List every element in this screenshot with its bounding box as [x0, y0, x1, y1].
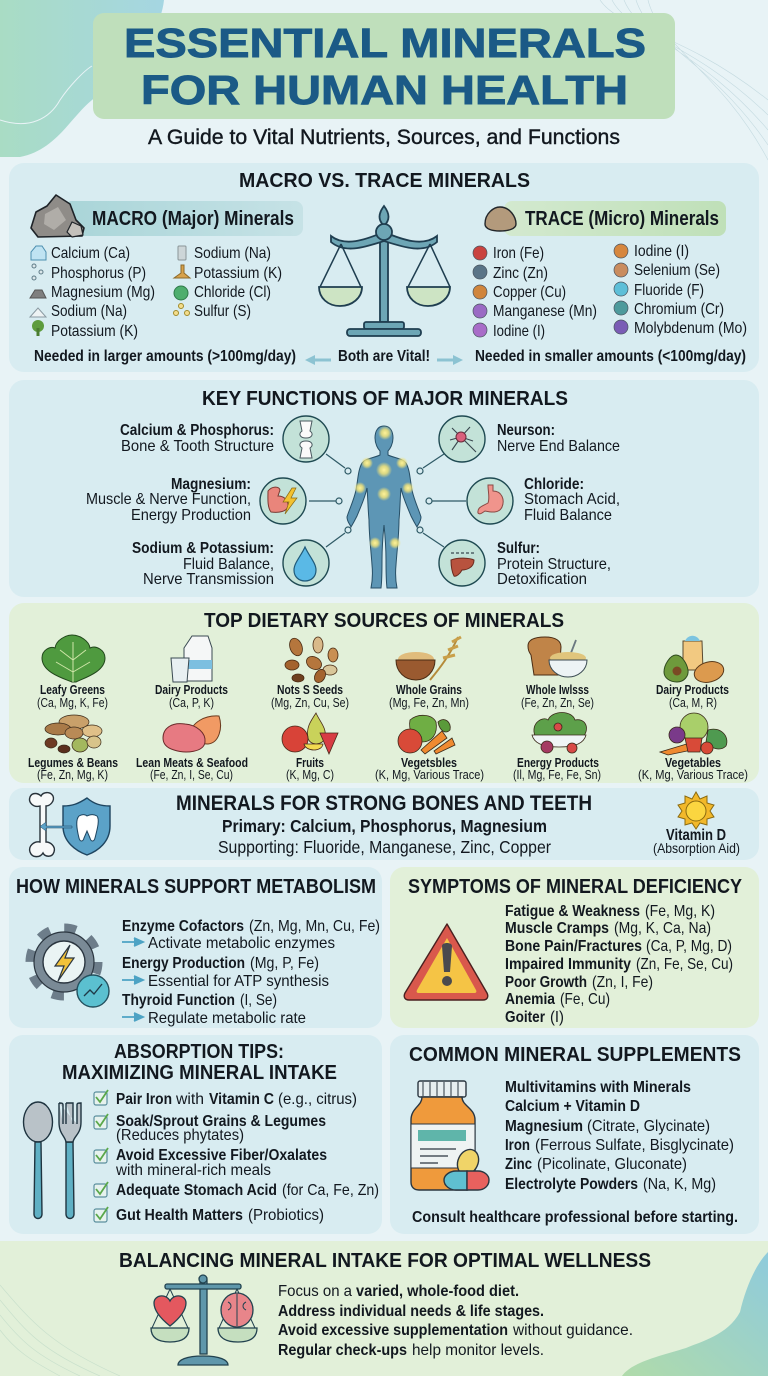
tips text: Avoid Excessive Fiber/Oxalates [116, 1147, 327, 1164]
tips text: Pair Iron [116, 1091, 172, 1108]
trace list: Fluoride (F) [634, 282, 704, 299]
function: neurson: Nerve End Balance [497, 438, 620, 455]
function: chloride: Chloride: [524, 476, 584, 493]
macro list: Sodium (Na) [51, 303, 127, 320]
icon: rock [31, 195, 84, 237]
supplements list [505, 1079, 734, 1193]
function: sodium potassium: Fluid Balance, [183, 556, 274, 573]
vitamin D note: Vitamin D [666, 827, 726, 844]
symptoms list: Impaired Immunity [505, 956, 631, 973]
metabolism text: (I, Se) [240, 992, 277, 1009]
tips text: (e.g., citrus) [278, 1091, 357, 1108]
balancing text: Focus on a [278, 1283, 352, 1300]
trace list: Iodine (I) [634, 243, 689, 260]
icon: spoon and fork [24, 1102, 81, 1218]
comparison row [34, 348, 746, 365]
vitamin D note: (Absorption Aid) [653, 840, 740, 856]
symptoms list: Muscle Cramps [505, 920, 609, 937]
metabolism text: Thyroid Function [122, 992, 235, 1009]
balancing text: Address individual needs & life stages. [278, 1303, 544, 1320]
food: vegetables: (K, Mg, Various Trace) [375, 768, 484, 782]
icon: warning triangle [404, 924, 488, 1000]
trace list: Iron (Fe) [493, 245, 544, 262]
symptoms list: (Zn, Fe, Se, Cu) [636, 956, 733, 973]
icon: bone [30, 793, 54, 857]
food: vegetables: Vegetsbles [401, 756, 457, 770]
trace list: Chromium (Cr) [634, 301, 724, 318]
supplements list: (Picolinate, Gluconate) [537, 1156, 687, 1173]
symptoms list [505, 903, 733, 1026]
function: sodium potassium [132, 540, 274, 588]
supplements list: (Ferrous Sulfate, Bisglycinate) [535, 1137, 734, 1154]
icon: joint [283, 416, 329, 462]
food: whole grains [389, 637, 469, 710]
heading: supplements: COMMON MINERAL SUPPLEMENTS [409, 1044, 741, 1066]
title block: ESSENTIAL MINERALS [124, 20, 646, 66]
icon: gear with bolt [30, 928, 109, 1007]
tips text: with [175, 1091, 204, 1108]
function: magnesium: Energy Production [131, 507, 251, 524]
heading: absorption tips [62, 1041, 337, 1084]
macro pill: MACRO (Major) Minerals [92, 208, 294, 230]
function: chloride [524, 476, 620, 524]
icon: heart and brain balance [151, 1275, 257, 1365]
function: neurson: Neurson: [497, 422, 555, 439]
balancing text [278, 1283, 633, 1359]
function: chloride: Fluid Balance [524, 507, 612, 524]
supplements list: (Na, K, Mg) [643, 1176, 716, 1193]
function: magnesium [86, 476, 251, 524]
subtitle: A Guide to Vital Nutrients, Sources, and Functions [148, 125, 620, 149]
tips text [115, 1091, 379, 1224]
macro list: Magnesium (Mg) [51, 284, 155, 301]
panel: macro vs trace minerals [9, 163, 759, 372]
symptoms list: Poor Growth [505, 974, 587, 991]
food: legumes: (Fe, Zn, Mg, K) [37, 768, 108, 782]
panel: deficiency [390, 867, 759, 1028]
heading: macro vs trace: MACRO VS. TRACE MINERALS [239, 170, 530, 192]
icon: trace nugget [485, 207, 516, 231]
food: meat and seafood: (Fe, Zn, I, Se, Cu) [150, 768, 233, 782]
metabolism text: (Mg, P, Fe) [250, 955, 319, 972]
supporting minerals: Supporting: Fluoride, Manganese, Zinc, Copper [218, 837, 551, 857]
trace pill: TRACE (Micro) Minerals [525, 208, 719, 230]
symptoms list: (Mg, K, Ca, Na) [614, 920, 711, 937]
icon: balance scale [319, 206, 450, 336]
decorative footer blob [622, 1252, 768, 1376]
icon: stomach [467, 478, 513, 524]
food: leafy greens: (Ca, Mg, K, Fe) [37, 696, 108, 710]
tips text: Adequate Stomach Acid [116, 1182, 277, 1199]
function: neurson [497, 422, 620, 455]
trace list [493, 243, 747, 340]
function: sulfur: Sulfur: [497, 540, 540, 557]
icon: liver [439, 540, 485, 586]
food: avocado and juice: Dairy Products [656, 683, 729, 697]
food: leafy greens: Leafy Greens [40, 683, 105, 697]
food: mixed vegetables: Vegetables [665, 756, 721, 770]
symptoms list: (Fe, Mg, K) [645, 903, 715, 920]
tips text: (for Ca, Fe, Zn) [282, 1182, 379, 1199]
food: leafy greens [37, 635, 108, 710]
supplements list: (Citrate, Glycinate) [587, 1118, 710, 1135]
heading: balancing: BALANCING MINERAL INTAKE FOR OPTIMAL WELLNESS [119, 1250, 651, 1272]
connectors [309, 454, 466, 547]
trace list icons [473, 244, 628, 337]
function: sodium potassium: Nerve Transmission [143, 571, 274, 588]
macro list: Phosphorus (P) [51, 265, 146, 282]
symptoms list: Bone Pain/Fractures [505, 938, 642, 955]
food: meat and seafood: Lean Meats & Seafood [136, 756, 248, 770]
icon: muscle and bolt [260, 478, 306, 524]
icon: water drop [283, 540, 329, 586]
trace list: Selenium (Se) [634, 262, 720, 279]
food: legumes: Legumes & Beans [28, 756, 118, 770]
metabolism text: (Zn, Mg, Mn, Cu, Fe) [249, 918, 380, 935]
balancing text: without guidance. [512, 1322, 633, 1339]
icon: supplement bottle [411, 1081, 489, 1190]
food: bread and cereal [521, 637, 594, 710]
macro list: Sodium (Na) [194, 245, 271, 262]
heading: deficiency: SYMPTOMS OF MINERAL DEFICIENCY [408, 876, 743, 898]
food: bread and cereal: Whole Iwlsss [526, 683, 589, 697]
balancing text: varied, whole-food diet. [356, 1283, 519, 1300]
food: mixed vegetables: (K, Mg, Various Trace) [638, 768, 748, 782]
food: salad bowl: (Il, Mg, Fe, Fe, Sn) [513, 768, 601, 782]
tips text: with mineral-rich meals [115, 1162, 271, 1179]
supplements list: Magnesium [505, 1118, 583, 1135]
consult note: Consult healthcare professional before starting. [412, 1209, 738, 1226]
heading: absorption tips: ABSORPTION TIPS: [114, 1041, 284, 1063]
food: avocado and juice: (Ca, M, R) [669, 696, 717, 710]
metabolism text: Essential for ATP synthesis [148, 973, 329, 990]
food: meat and seafood [136, 716, 248, 782]
heading: metabolism: HOW MINERALS SUPPORT METABOLISM [16, 876, 376, 898]
tips checkmarks [94, 1090, 108, 1222]
macro pill [64, 201, 303, 236]
title block [93, 13, 675, 119]
food: dairy: Dairy Products [155, 683, 228, 697]
food: nuts and seeds [271, 636, 349, 710]
symptoms list: (Fe, Cu) [560, 991, 610, 1008]
trace pill [504, 201, 726, 236]
trace list: Manganese (Mn) [493, 303, 597, 320]
function: sulfur [497, 540, 611, 588]
primary minerals: Primary: Calcium, Phosphorus, Magnesium [222, 816, 547, 836]
heading: dietary sources: TOP DIETARY SOURCES OF MINERALS [204, 610, 564, 632]
function: calcium phosphorus: Calcium & Phosphorus: [120, 422, 274, 439]
function: magnesium: Muscle & Nerve Function, [86, 491, 251, 508]
metabolism text: Activate metabolic enzymes [148, 935, 335, 952]
food: vegetables [375, 715, 484, 782]
panel: balancing intake footer [0, 1241, 768, 1376]
macro list [51, 245, 282, 340]
tips text: Soak/Sprout Grains & Legumes [116, 1113, 326, 1130]
panel: key functions [9, 380, 759, 597]
food: whole grains: Whole Grains [396, 683, 462, 697]
vitamin D note [653, 827, 740, 856]
tips text: (Reduces phytates) [116, 1127, 244, 1144]
supplements list: Iron [505, 1137, 530, 1154]
function: sulfur: Detoxification [497, 571, 587, 588]
panel: supplements [390, 1035, 759, 1234]
symptoms list: Fatigue & Weakness [505, 903, 640, 920]
function: chloride: Stomach Acid, [524, 491, 620, 508]
food: fruits: Fruits [296, 756, 324, 770]
macro list: Chloride (Cl) [194, 284, 271, 301]
food: bread and cereal: (Fe, Zn, Zn, Se) [521, 696, 594, 710]
food: fruits: (K, Mg, C) [286, 768, 334, 782]
food: legumes [28, 715, 118, 782]
panel: dietary sources [9, 603, 759, 783]
comparison row: Needed in larger amounts (>100mg/day) [34, 348, 296, 365]
supplements list: Electrolyte Powders [505, 1176, 638, 1193]
metabolism text: Enzyme Cofactors [122, 918, 244, 935]
food: mixed vegetables [638, 713, 748, 782]
trace list: Molybdenum (Mo) [634, 320, 747, 337]
macro list: Sulfur (S) [194, 303, 251, 320]
metabolism text: Energy Production [122, 955, 245, 972]
balancing text: help monitor levels. [412, 1342, 544, 1359]
metabolism text: Regulate metabolic rate [148, 1010, 306, 1027]
heading: key functions: KEY FUNCTIONS OF MAJOR MINERALS [202, 388, 568, 410]
icon: sun [678, 792, 714, 829]
tips text: (Probiotics) [248, 1207, 324, 1224]
panel: absorption tips [9, 1035, 382, 1234]
function: calcium phosphorus [120, 422, 274, 455]
metabolism text [122, 918, 380, 1027]
tips text: Gut Health Matters [116, 1207, 243, 1224]
food: dairy [155, 636, 228, 710]
food: fruits [282, 713, 338, 782]
food: dairy: (Ca, P, K) [169, 696, 214, 710]
heading: bones and teeth: MINERALS FOR STRONG BONES AND TEETH [176, 791, 592, 815]
supplements list: Calcium + Vitamin D [505, 1098, 640, 1115]
food: nuts and seeds: (Mg, Zn, Cu, Se) [271, 696, 349, 710]
macro list: Calcium (Ca) [51, 245, 130, 262]
macro list: Potassium (K) [194, 265, 282, 282]
food: avocado and juice [656, 636, 729, 710]
food: whole grains: (Mg, Fe, Zn, Mn) [389, 696, 469, 710]
function: magnesium: Magnesium: [171, 476, 251, 493]
decorative top-left blob [0, 0, 164, 157]
symptoms list: (Zn, I, Fe) [592, 974, 653, 991]
macro list: Potassium (K) [51, 323, 138, 340]
panel: bones and teeth [9, 788, 759, 860]
tips text: Vitamin C [209, 1091, 274, 1108]
symptoms list: (Ca, P, Mg, D) [646, 938, 732, 955]
macro list icons [30, 246, 190, 336]
function: calcium phosphorus: Bone & Tooth Structure [121, 438, 274, 455]
balancing text: Avoid excessive supplementation [278, 1322, 508, 1339]
food: nuts and seeds: Nots S Seeds [277, 683, 343, 697]
function: sulfur: Protein Structure, [497, 556, 611, 573]
food: salad bowl: Energy Products [517, 756, 599, 770]
trace list: Iodine (I) [493, 323, 545, 340]
icon: tooth shield [40, 798, 110, 855]
trace list: Copper (Cu) [493, 284, 566, 301]
balancing text: Regular check-ups [278, 1342, 407, 1359]
function: sodium potassium: Sodium & Potassium: [132, 540, 274, 557]
comparison row: Both are Vital! [338, 348, 430, 365]
symptoms list: Anemia [505, 991, 555, 1008]
food: salad bowl [513, 712, 601, 782]
heading: absorption tips: MAXIMIZING MINERAL INTAKE [62, 1062, 337, 1084]
supplements list: Zinc [505, 1156, 532, 1173]
icon: neuron [439, 416, 485, 462]
panel: metabolism [9, 867, 382, 1028]
title block: FOR HUMAN HEALTH [141, 67, 628, 113]
symptoms list: (I) [550, 1009, 564, 1026]
trace list: Zinc (Zn) [493, 265, 548, 282]
supplements list: Multivitamins with Minerals [505, 1079, 691, 1096]
icon: human body [347, 426, 421, 588]
symptoms list: Goiter [505, 1009, 545, 1026]
